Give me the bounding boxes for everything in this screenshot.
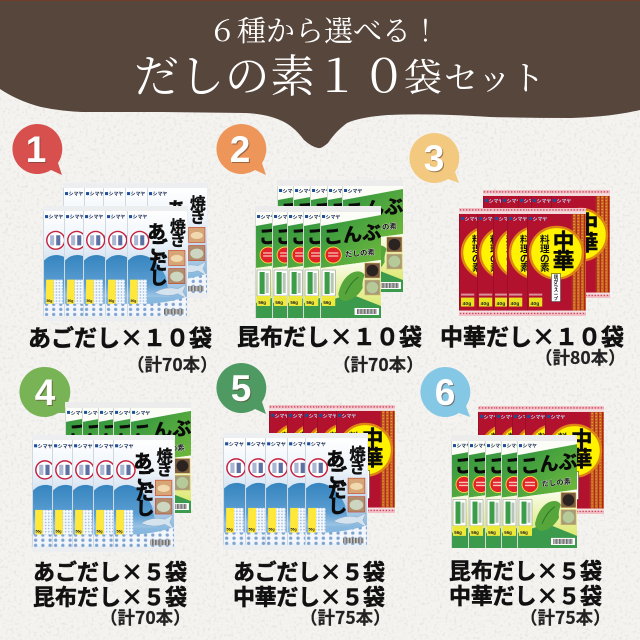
badge 6: 6 [435, 372, 455, 413]
packs: chuka front stack [459, 208, 586, 316]
packs: chuka back stack [483, 190, 610, 298]
title [134, 15, 545, 102]
label 6: 昆布だし×５袋 [449, 554, 602, 586]
packs: konbu front stack [255, 206, 382, 318]
badge 3: 3 [424, 138, 444, 179]
badge 5: 5 [231, 368, 251, 409]
header banner [0, 0, 640, 148]
count 2: （計70本） [333, 352, 424, 377]
main title: ０ [361, 52, 407, 102]
packs: ago front stack [32, 435, 175, 552]
panel: set 3 [409, 133, 626, 370]
label 6 [449, 554, 602, 611]
count 1: （計70本） [127, 352, 218, 377]
label 4 [33, 555, 187, 612]
panel: set 4 [19, 367, 192, 630]
badge 5 [216, 363, 266, 414]
count 6: （計75本） [520, 605, 611, 630]
label 6: 中華だし×５袋 [449, 579, 602, 611]
packs: konbu back stack [65, 402, 192, 513]
count 3: （計80本） [535, 345, 626, 370]
badge 1: 1 [26, 129, 46, 170]
packs: ago back stack [63, 183, 208, 298]
packs: chuka back stack [478, 406, 604, 514]
panel: set 6 [420, 367, 611, 630]
count 5: （計75本） [300, 605, 391, 630]
label 5: あごだし×５袋 [233, 555, 385, 587]
badge 4 [19, 367, 70, 417]
label 3: 中華だし×１０袋 [440, 318, 624, 352]
badge 2 [216, 124, 266, 175]
main title: １ [314, 52, 360, 102]
badge 2: 2 [230, 129, 250, 170]
badge 3 [409, 133, 459, 183]
label 5: 中華だし×５袋 [233, 580, 385, 612]
badge 6 [420, 367, 470, 417]
count 4: （計70本） [100, 605, 191, 630]
subtitle: ６種から選べる！ [208, 15, 440, 48]
label 4: 昆布だし×５袋 [33, 580, 187, 612]
main title [134, 52, 545, 102]
packs: konbu front stack [451, 435, 578, 548]
packs: ago front stack [223, 433, 368, 550]
badge 1 [12, 124, 62, 175]
label 5 [233, 555, 385, 612]
badge 4: 4 [35, 372, 56, 413]
label 4: あごだし×５袋 [33, 555, 187, 587]
panel: set 5 [216, 363, 395, 630]
packs: ago front stack [43, 206, 188, 321]
label 2: 昆布だし×１０袋 [237, 318, 422, 352]
packs: konbu back stack [277, 180, 404, 292]
main title: だしの素 [134, 52, 315, 102]
main title: セット [444, 61, 545, 98]
label 1: あごだし×１０袋 [28, 319, 212, 353]
main title: 袋 [404, 58, 442, 100]
packs: chuka back stack [269, 405, 395, 513]
panel: set 1 [12, 124, 218, 377]
panel: set 2 [216, 124, 424, 377]
